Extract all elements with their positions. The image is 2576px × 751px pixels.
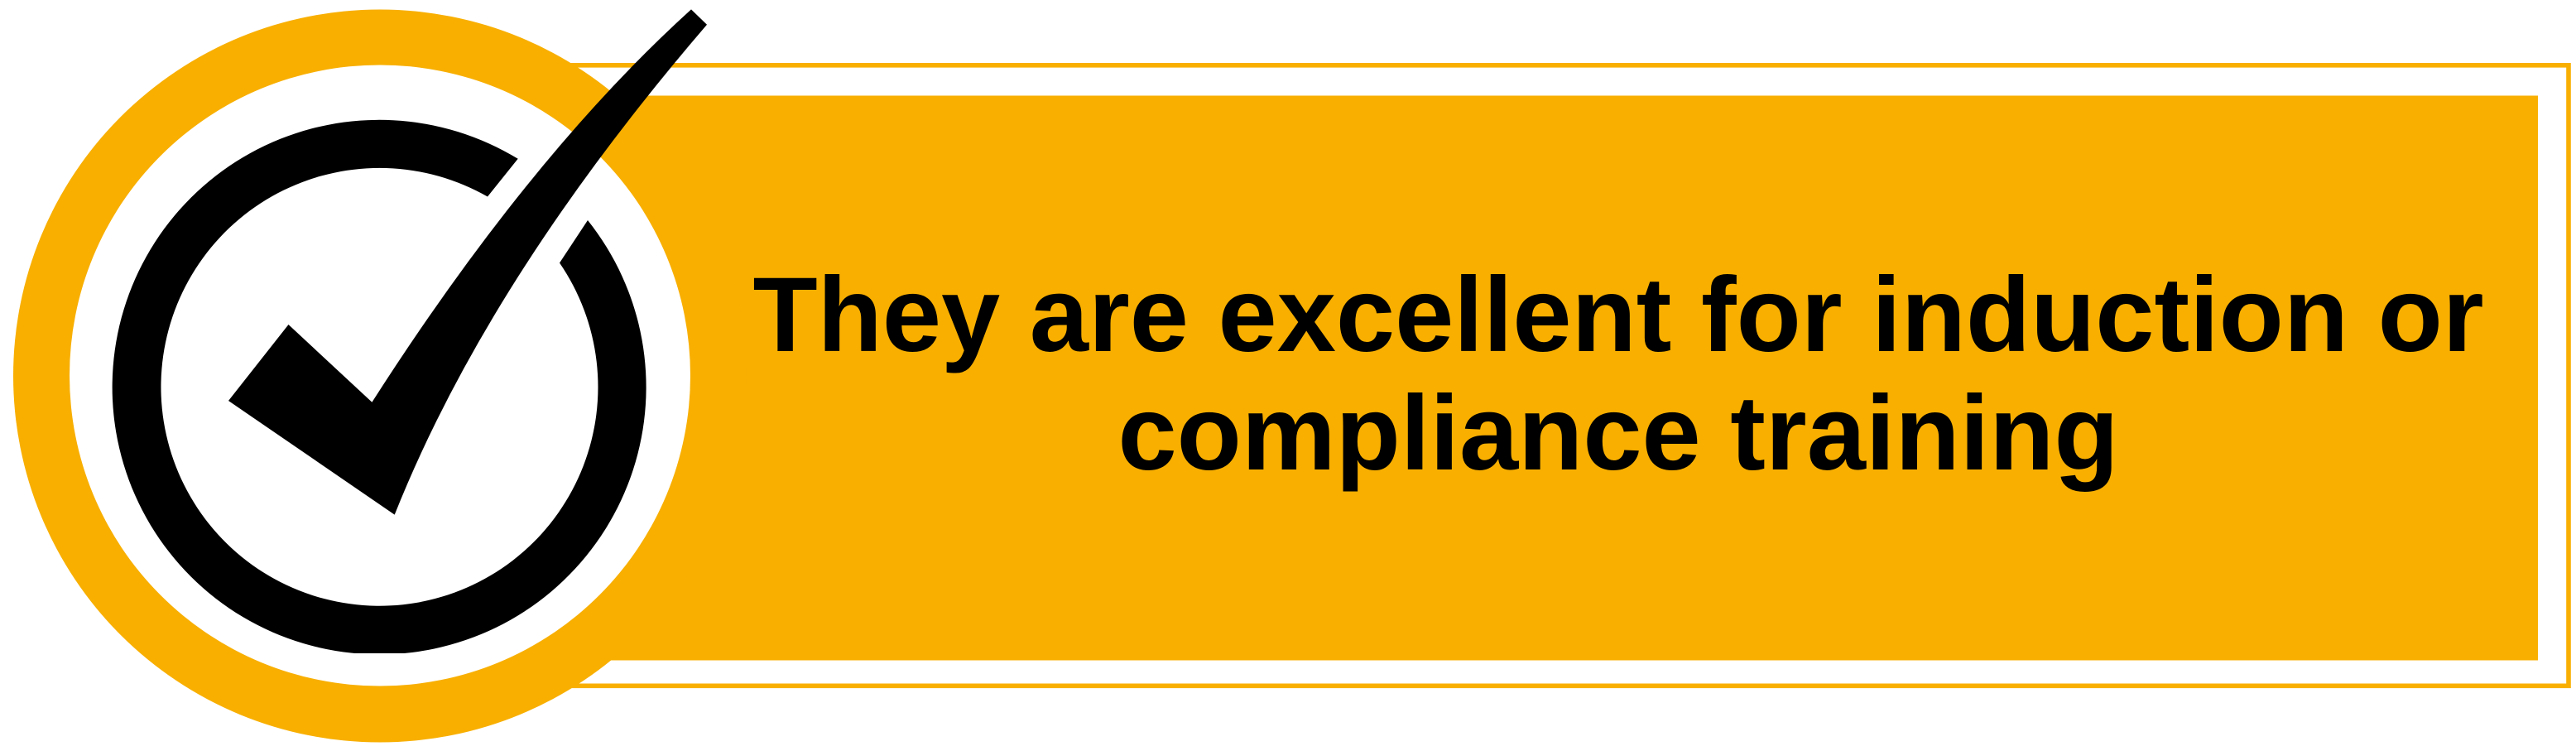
badge: white disc bbox=[70, 65, 690, 686]
icon: black ring with gap bbox=[113, 120, 646, 654]
banner text bbox=[752, 256, 2484, 493]
banner text: compliance training bbox=[1117, 374, 2119, 493]
icon: check mark bbox=[228, 9, 707, 515]
badge: orange ring bbox=[13, 10, 747, 742]
banner fill panel bbox=[497, 96, 2538, 661]
outer banner frame bbox=[497, 65, 2569, 686]
banner text: They are excellent for induction or bbox=[752, 256, 2484, 374]
